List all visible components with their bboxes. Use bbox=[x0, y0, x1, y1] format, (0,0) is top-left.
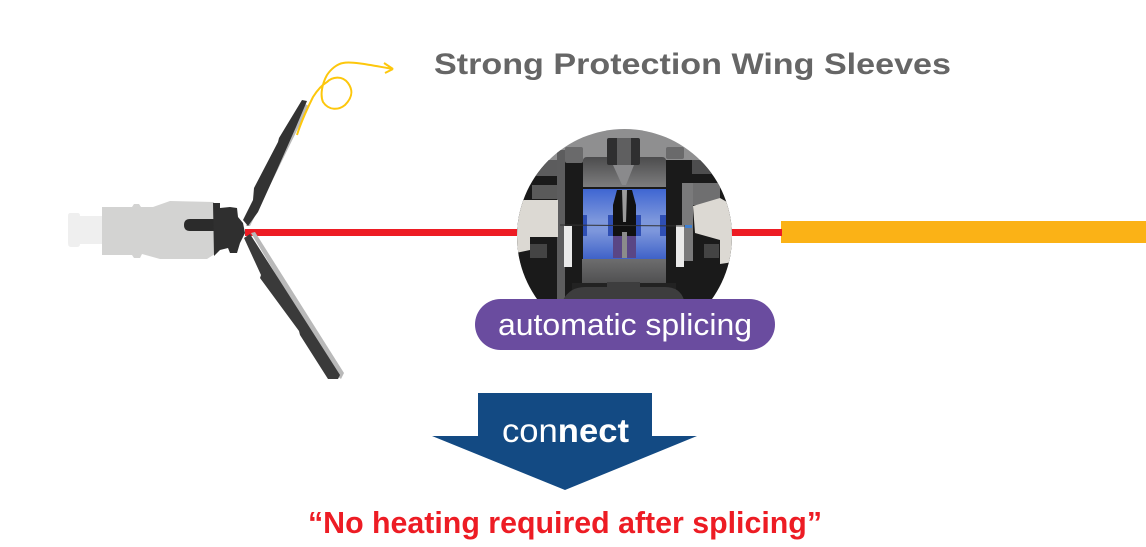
connector boot bbox=[213, 203, 245, 256]
connector latch slot bbox=[184, 219, 216, 231]
upper wing sleeve bbox=[243, 100, 309, 226]
connect arrow bbox=[432, 393, 697, 490]
centre well bbox=[613, 190, 636, 236]
curly yellow fiber with arrow bbox=[297, 63, 393, 135]
bare fiber bbox=[560, 225, 692, 228]
title: Strong Protection Wing Sleeves bbox=[434, 48, 951, 81]
left rail bbox=[557, 150, 565, 299]
connector body bbox=[102, 201, 218, 259]
connector ferrule bbox=[68, 213, 102, 247]
lower wing sleeve bbox=[244, 232, 344, 379]
right white strip bbox=[676, 225, 684, 267]
connector with wing sleeves bbox=[68, 100, 344, 379]
automatic splicing pill: automatic splicing bbox=[498, 307, 752, 342]
upper grey block bbox=[583, 157, 666, 187]
red fiber line bbox=[245, 229, 782, 236]
left clamp bbox=[516, 185, 558, 258]
left white strip bbox=[564, 226, 572, 267]
lower chassis block bbox=[572, 283, 676, 344]
blue v-groove plate bbox=[583, 189, 666, 259]
black chassis bbox=[517, 160, 732, 299]
yellow fiber cable bbox=[781, 221, 1146, 243]
right clamp bbox=[682, 183, 734, 264]
lower grey block bbox=[582, 259, 666, 283]
top electrode bbox=[607, 138, 640, 185]
bottom connector block bbox=[563, 282, 684, 300]
splicer photo circle bbox=[517, 129, 732, 299]
connect arrow: connect bbox=[502, 412, 629, 449]
top corner blocks bbox=[565, 147, 583, 163]
automatic splicing pill bbox=[475, 299, 775, 350]
red statement: “No heating required after splicing” bbox=[308, 505, 822, 540]
